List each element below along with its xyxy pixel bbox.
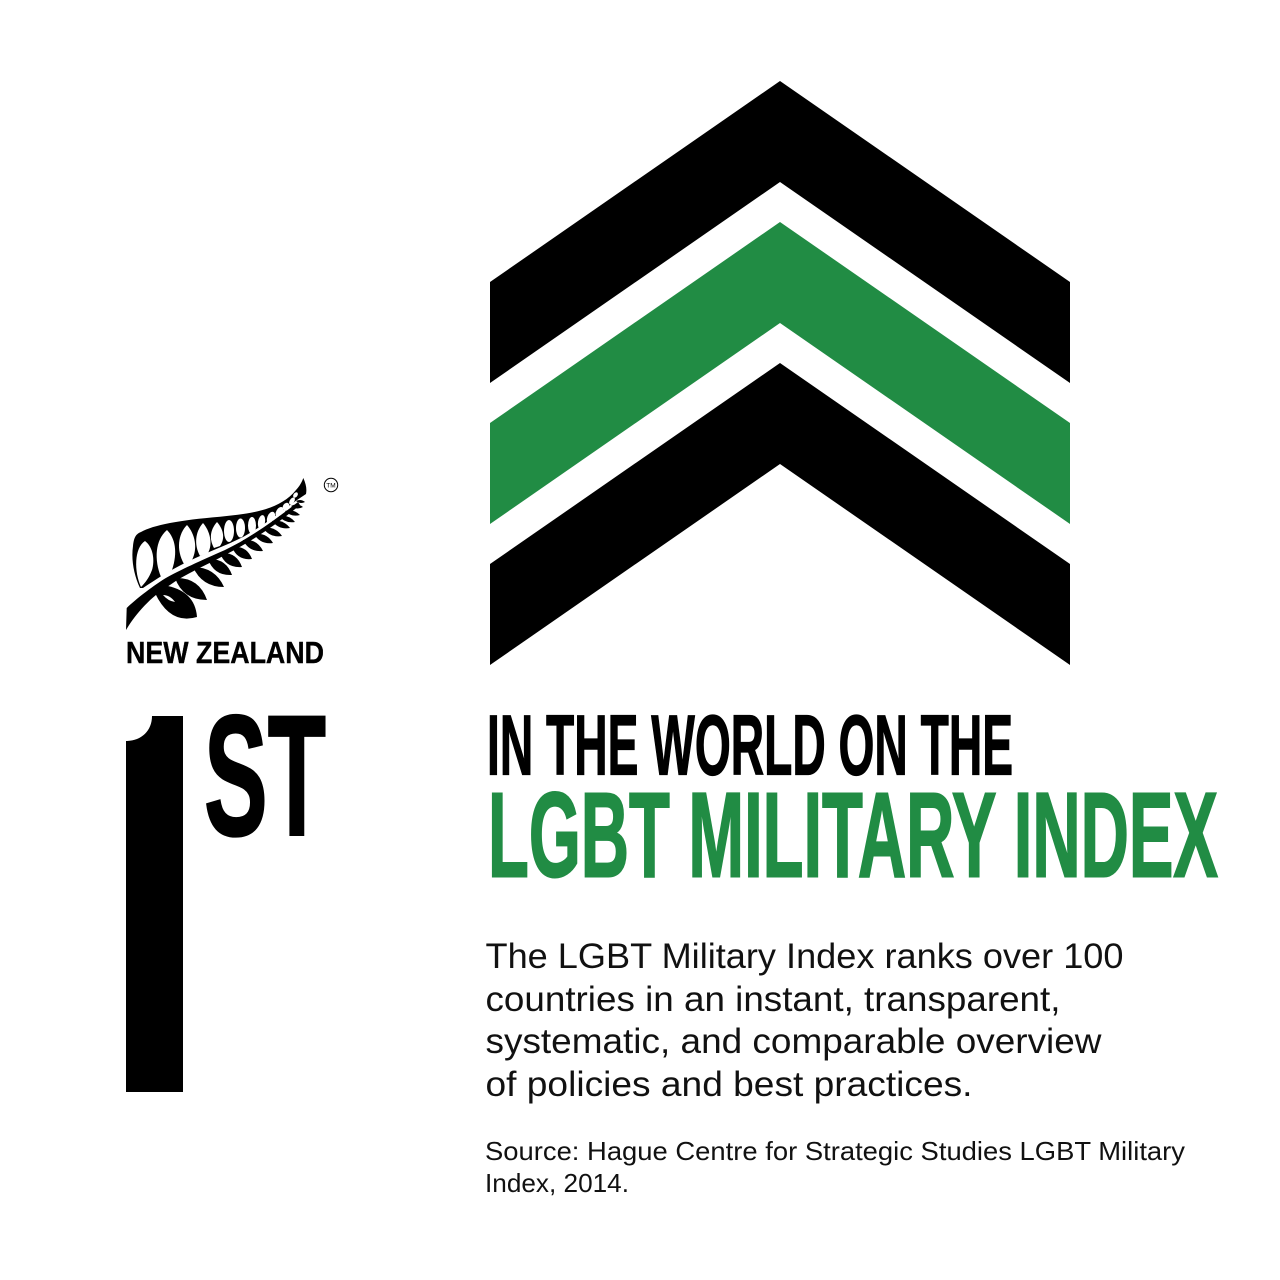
logo: New Zealand silver fern: [126, 478, 338, 670]
ordinal suffix: ST: [204, 680, 326, 872]
description text: The LGBT Military Index ranks over 100: [486, 937, 1124, 976]
icon: trademark: TM: [326, 482, 336, 490]
description text: [486, 937, 1124, 1104]
bottom black chevron: [490, 363, 1070, 665]
rank: 1st: [126, 714, 326, 1092]
source note: [485, 1136, 1185, 1198]
top black chevron: [490, 81, 1070, 383]
source note: Source: Hague Centre for Strategic Studies LGBT Military: [485, 1136, 1185, 1166]
icon: rank chevrons: [490, 81, 1070, 665]
description text: of policies and best practices.: [486, 1065, 972, 1104]
icon: fern: [126, 478, 306, 630]
infographic canvas: [126, 81, 1218, 1196]
icon: trademark: [324, 478, 338, 492]
logo wordmark: NEW ZEALAND: [126, 636, 324, 670]
source note: Index, 2014.: [485, 1168, 629, 1198]
middle green chevron: [490, 222, 1070, 524]
description text: countries in an instant, transparent,: [486, 980, 1060, 1019]
description text: systematic, and comparable overview: [486, 1022, 1102, 1061]
